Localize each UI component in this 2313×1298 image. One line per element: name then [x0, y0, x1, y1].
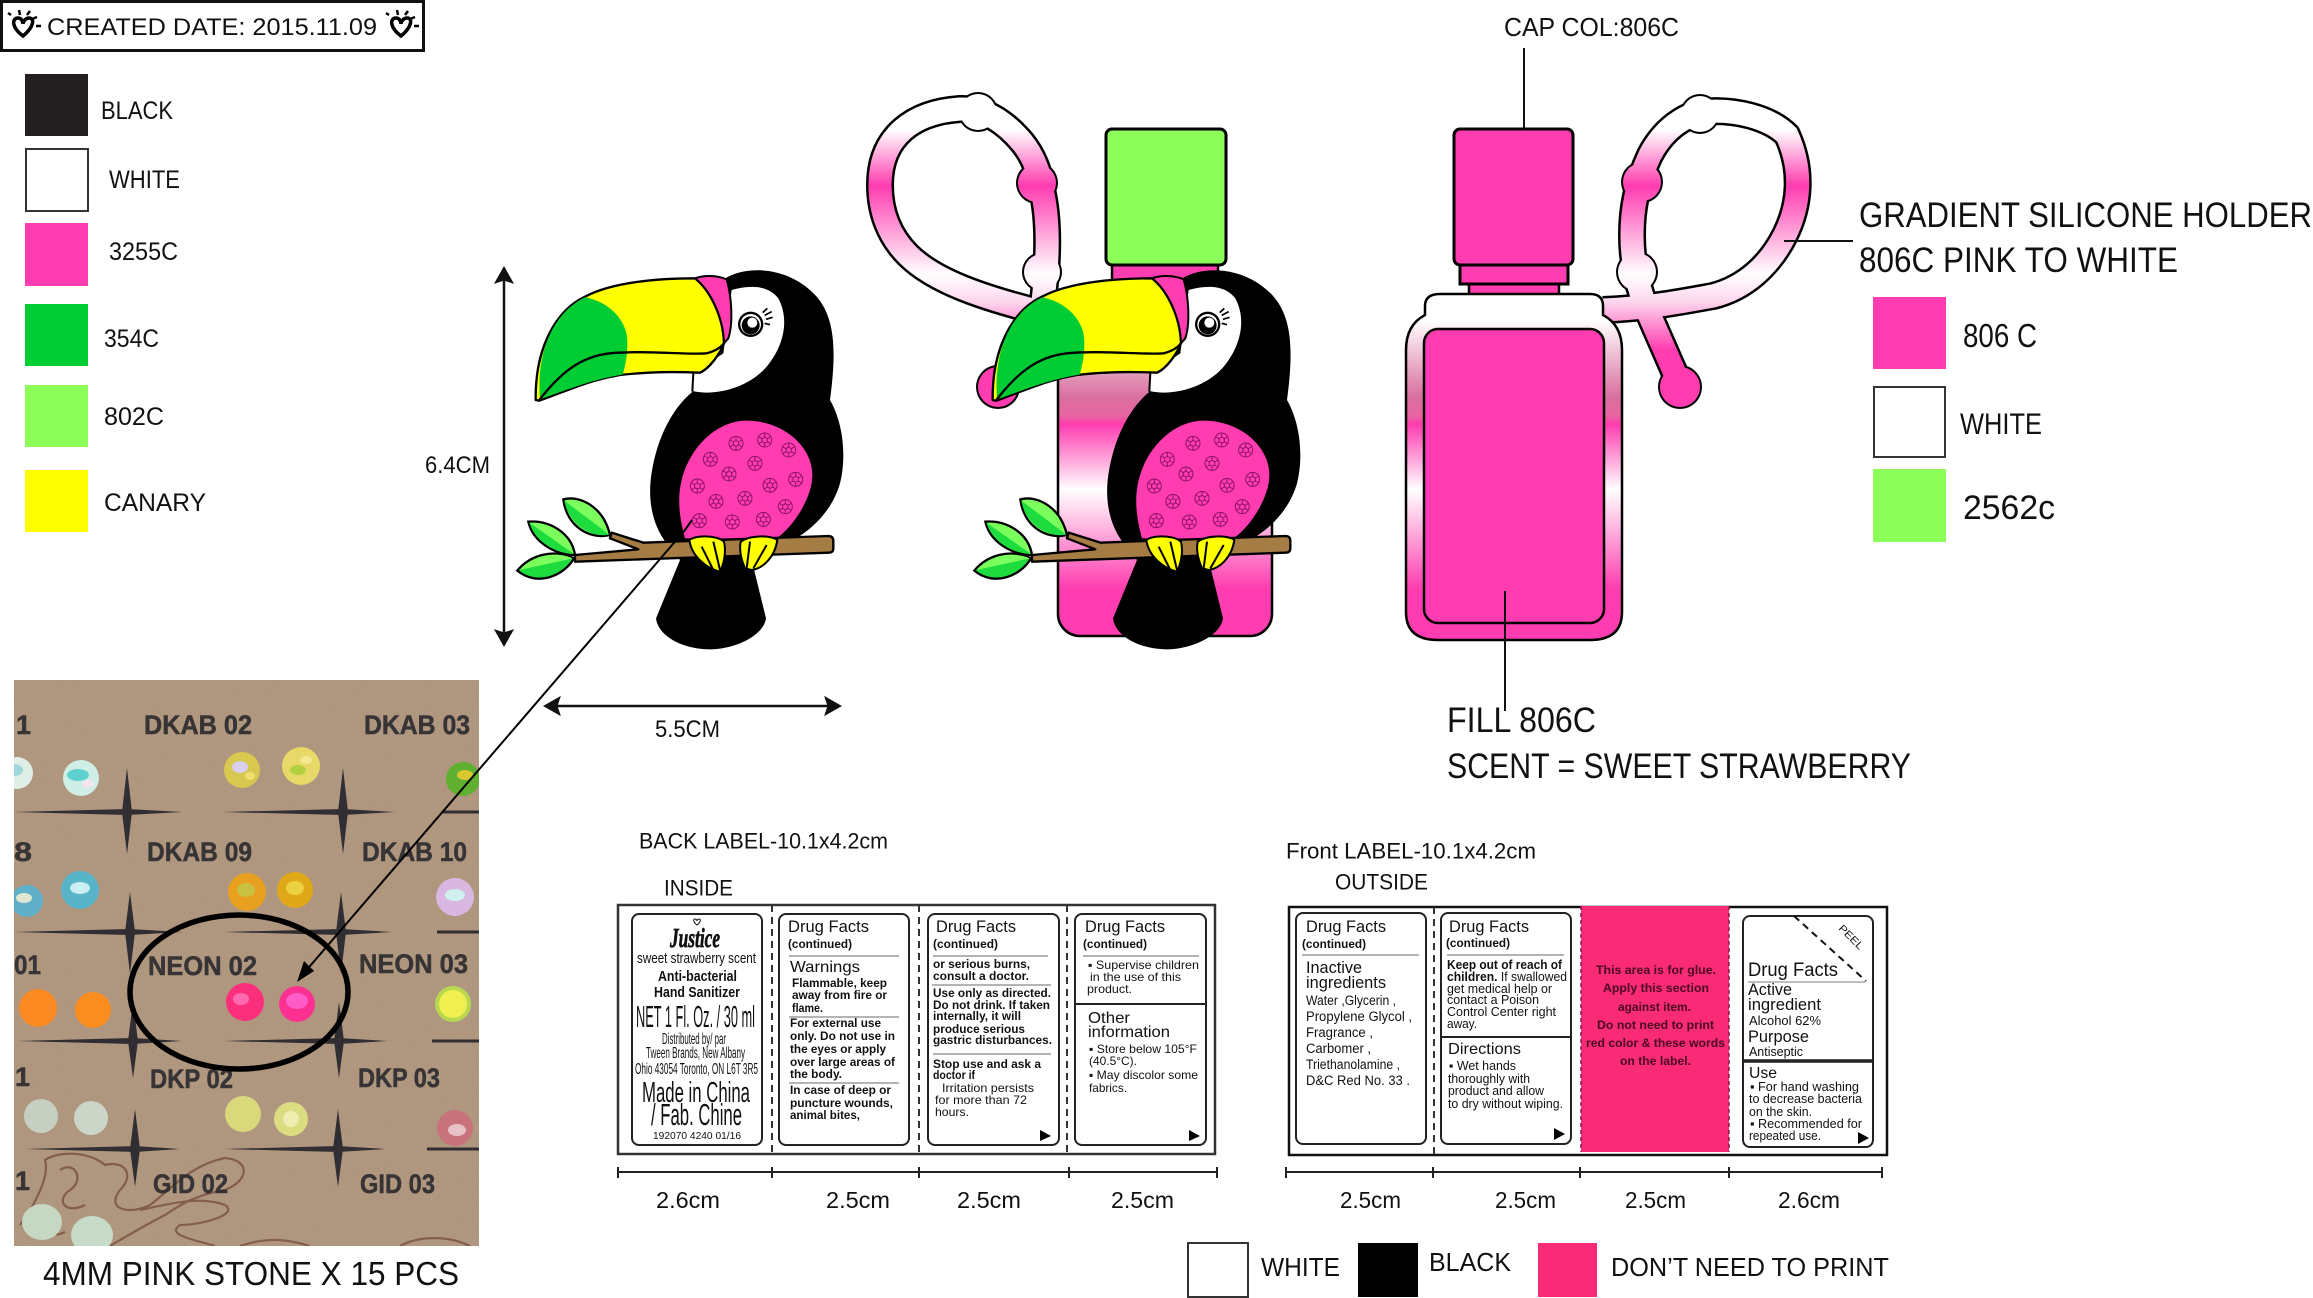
label panel: keep out of reach and directions: product and allow	[1448, 1084, 1545, 1098]
icon: heart right	[386, 10, 419, 36]
label panel: use and stop use: Drug Facts	[936, 917, 1016, 936]
photo: stone sample sheet: DKP 02	[150, 1064, 233, 1094]
label panel: glue area: Apply this section	[1603, 981, 1709, 995]
label panel: inactive ingredients: Triethanolamine ,	[1306, 1057, 1400, 1072]
front label dimension rule: 2.5cm	[1495, 1187, 1556, 1213]
label panel: active ingredient and use: Drug Facts	[1748, 960, 1838, 981]
label panel: active ingredient and use: PEEL	[1836, 923, 1866, 952]
label panel: keep out of reach and directions	[1441, 913, 1571, 1144]
label panel: product front: Distributed by/ par	[662, 1031, 726, 1048]
label panel: other information: Other	[1088, 1010, 1131, 1027]
icon: heart left	[8, 10, 41, 36]
photo: stone sample sheet: 01	[14, 950, 41, 980]
print legend	[1188, 1243, 1889, 1297]
label panel: use and stop use: internally, it will	[933, 1009, 1021, 1023]
label panel: product front: Justice	[669, 923, 720, 953]
label panel: other information: ▪ Supervise children	[1088, 958, 1199, 972]
print legend: WHITE	[1261, 1252, 1340, 1282]
map doodles	[20, 1154, 470, 1246]
label panel: use and stop use: Stop use and ask a	[933, 1057, 1041, 1071]
colour legend left: CANARY	[104, 489, 206, 517]
label panel: active ingredient and use: ▪ For hand washing	[1750, 1079, 1859, 1094]
label panel: product front: / Fab. Chine	[651, 1097, 742, 1132]
label panel: use and stop use: produce serious	[933, 1022, 1025, 1036]
label panel: use and stop use: consult a doctor.	[933, 969, 1029, 983]
label panel: other information: fabrics.	[1089, 1081, 1127, 1095]
label panel: inactive ingredients: Inactive	[1306, 958, 1362, 977]
photo: stone sample sheet: NEON 03	[359, 949, 468, 979]
panel: back label: NET 1 Fl. Oz. / 30 ml	[636, 999, 755, 1034]
photo: stone sample sheet: DKAB 10	[362, 837, 467, 867]
label panel: product front: Tween Brands, New Albany	[646, 1045, 745, 1062]
label panel: keep out of reach and directions: ▪ Wet hands	[1449, 1059, 1516, 1073]
collar	[1460, 265, 1568, 284]
label panel: use and stop use: or serious burns,	[933, 957, 1030, 971]
label panel: keep out of reach and directions: contact a Poison	[1447, 993, 1539, 1007]
colour legend left: BLACK	[101, 97, 173, 125]
height dimension arrow 6.4CM: 6.4CM	[425, 452, 490, 479]
label panel: other information	[1075, 914, 1206, 1145]
pink bottle with gradient holder	[1406, 94, 1798, 640]
label panel: keep out of reach and directions: get medical help or	[1447, 982, 1552, 996]
label panel: use and stop use: for more than 72	[935, 1093, 1027, 1107]
label panel: warnings: puncture wounds,	[790, 1096, 893, 1110]
label panel: warnings: For external use	[790, 1016, 881, 1030]
front label heading: OUTSIDE	[1335, 870, 1428, 894]
panel: front label	[1289, 906, 1887, 1155]
label panel: warnings: Drug Facts	[788, 917, 869, 936]
label panel: active ingredient and use: Purpose	[1748, 1028, 1809, 1046]
label panel: keep out of reach and directions: (continued)	[1446, 936, 1510, 950]
front label dimension rule	[1286, 1167, 1882, 1213]
photo: stone sample sheet: 1	[15, 1062, 30, 1092]
label panel: active ingredient and use	[1743, 916, 1873, 1147]
green cap bottle with holder and toucan	[880, 92, 1300, 649]
label panel: use and stop use: Use only as directed.	[933, 986, 1051, 1000]
label panel: use and stop use: (continued)	[933, 937, 998, 951]
print legend: BLACK	[1429, 1247, 1512, 1277]
back label heading: BACK LABEL-10.1x4.2cm	[639, 828, 888, 854]
label panel: keep out of reach and directions: away.	[1447, 1017, 1477, 1031]
neck	[1469, 284, 1559, 296]
label panel: inactive ingredients: Carbomer ,	[1306, 1041, 1371, 1056]
label panel: product front: sweet strawberry scent	[637, 950, 757, 967]
label panel: other information: in the use of this	[1090, 970, 1181, 984]
label panel: warnings: Flammable, keep	[792, 976, 887, 990]
label panel: warnings: flame.	[792, 1001, 823, 1015]
bottle fill	[1424, 329, 1604, 623]
neck	[1112, 262, 1218, 332]
label panel: active ingredient and use: ingredient	[1748, 996, 1821, 1014]
label panel: other information: information	[1088, 1024, 1170, 1041]
colour legend left: 354C	[104, 325, 159, 353]
label panel: product front: Hand Sanitizer	[654, 985, 740, 1001]
holder colour legend: 806 C	[1963, 317, 2037, 354]
holder colour legend	[1873, 297, 2055, 542]
photo: stone sample sheet: DKAB 03	[364, 710, 470, 740]
back label heading	[639, 828, 888, 900]
label panel: keep out of reach and directions: Drug Facts	[1449, 917, 1529, 936]
photo: stone sample sheet: GID 03	[360, 1169, 435, 1199]
height dimension arrow 6.4CM	[425, 267, 513, 646]
label panel: keep out of reach and directions: Control Center right	[1447, 1005, 1557, 1019]
date text: CREATED DATE: 2015.11.09	[47, 14, 377, 41]
label panel: warnings: (continued)	[788, 937, 852, 951]
label panel: warnings: In case of deep or	[790, 1083, 891, 1097]
holder colour legend: 2562c	[1963, 489, 2055, 527]
label panel: warnings: Warnings	[790, 959, 860, 976]
label panel: active ingredient and use: to decrease bacteria	[1749, 1091, 1863, 1106]
label panel: warnings: animal bites,	[790, 1108, 860, 1122]
colour legend left: WHITE	[109, 166, 180, 194]
label panel: warnings: only. Do not use in	[790, 1029, 895, 1043]
label panel: inactive ingredients	[1296, 913, 1426, 1144]
label panel: active ingredient and use: Active	[1748, 981, 1792, 999]
label panel: glue area	[1581, 906, 1729, 1152]
back label dimension rule	[618, 1167, 1217, 1213]
width dimension arrow 5.5CM: 5.5CM	[655, 716, 720, 743]
bottle body gradient	[1058, 330, 1272, 636]
fill and scent callout	[1447, 591, 1911, 786]
panel: back label	[618, 905, 1215, 1154]
label panel: use and stop use	[928, 914, 1059, 1145]
code labels: DKAB 02	[144, 710, 252, 740]
label panel: keep out of reach and directions: thoroughly with	[1448, 1072, 1530, 1086]
colour legend left: 3255C	[109, 238, 178, 266]
label panel: glue area: on the label.	[1620, 1054, 1691, 1068]
label panel: other information: (continued)	[1083, 937, 1147, 951]
fill and scent callout: SCENT = SWEET STRAWBERRY	[1447, 747, 1911, 786]
label panel: keep out of reach and directions: Directions	[1448, 1041, 1521, 1058]
colour legend left	[25, 74, 206, 532]
photo: stone sample sheet: DKP 03	[358, 1063, 440, 1093]
label panel: active ingredient and use: Alcohol 62%	[1749, 1013, 1821, 1028]
label panel: inactive ingredients: (continued)	[1302, 937, 1366, 951]
label panel: inactive ingredients: Drug Facts	[1306, 917, 1386, 936]
photo: stone sample sheet	[1, 680, 480, 1254]
gradient holder callout	[1784, 196, 2312, 280]
colour legend left: 802C	[104, 403, 164, 431]
fill and scent callout: FILL 806C	[1447, 701, 1596, 740]
label panel: inactive ingredients: D&C Red No. 33 .	[1306, 1073, 1410, 1088]
label panel: glue area: Do not need to print	[1597, 1018, 1714, 1032]
width dimension arrow 5.5CM	[544, 697, 841, 743]
label panel: inactive ingredients: Fragrance ,	[1306, 1025, 1373, 1040]
label panel: active ingredient and use: on the skin.	[1749, 1104, 1812, 1119]
photo: stone sample sheet: 1	[15, 1166, 30, 1196]
label panel: keep out of reach and directions: Keep out of reach of	[1447, 958, 1563, 972]
back label dimension rule: 2.5cm	[826, 1187, 890, 1213]
label panel: use and stop use: doctor if	[933, 1068, 976, 1082]
label panel: warnings: the body.	[790, 1067, 842, 1081]
back label dimension rule: 2.5cm	[957, 1187, 1021, 1213]
back label dimension rule: 2.5cm	[1111, 1187, 1174, 1213]
holder colour legend: WHITE	[1960, 408, 2042, 441]
label panel: product front: Anti-bacterial	[658, 969, 737, 985]
label panel: other information: ▪ Store below 105°F	[1089, 1042, 1197, 1056]
back label dimension rule: 2.6cm	[656, 1187, 720, 1213]
silicone holder back	[880, 92, 1062, 409]
arrow: stone placement to sample	[297, 520, 692, 982]
label panel: warnings: the eyes or apply	[790, 1042, 886, 1056]
label panel: glue area: This area is for glue.	[1596, 963, 1716, 977]
bottle outer	[1406, 294, 1622, 640]
label panel: product front: Made in China	[642, 1077, 751, 1109]
label panel: warnings: over large areas of	[790, 1055, 896, 1069]
label panel: product front	[632, 914, 762, 1145]
label panel: active ingredient and use: repeated use.	[1749, 1128, 1821, 1143]
label panel: keep out of reach and directions: children. If swallowed	[1447, 970, 1567, 984]
label panel: warnings	[779, 914, 909, 1145]
label panel: product front: Ohio 43054 Toronto, ON L6T 3R5	[635, 1061, 758, 1078]
print legend: DON’T NEED TO PRINT	[1611, 1252, 1889, 1282]
label panel: active ingredient and use: ▪ Recommended for	[1750, 1116, 1863, 1131]
gradient holder callout: 806C PINK TO WHITE	[1859, 241, 2178, 280]
front label heading: Front LABEL-10.1x4.2cm	[1286, 838, 1536, 864]
label panel: product front: 192070 4240 01/16	[653, 1130, 741, 1142]
callout ellipse around NEON 02	[130, 915, 348, 1069]
label panel: other information: (40.5°C).	[1089, 1054, 1137, 1068]
label panel: warnings: away from fire or	[792, 988, 887, 1002]
label panel: keep out of reach and directions: to dry without wiping.	[1448, 1097, 1563, 1111]
front label dimension rule: 2.6cm	[1778, 1187, 1840, 1213]
photo: stone sample sheet: 1	[16, 710, 31, 740]
back label heading: INSIDE	[664, 876, 733, 900]
toucan on bottle	[974, 270, 1300, 649]
stone caption: 4MM PINK STONE X 15 PCS	[43, 1255, 459, 1292]
photo: stone sample sheet: NEON 02	[148, 951, 257, 981]
photo: stone sample sheet: DKAB 09	[147, 837, 252, 867]
photo: stone sample sheet: 8	[14, 837, 32, 867]
pink cap	[1454, 129, 1573, 265]
label panel: inactive ingredients: Propylene Glycol ,	[1306, 1009, 1412, 1024]
created date header	[2, 2, 424, 50]
label panel: active ingredient and use: Antiseptic	[1749, 1044, 1803, 1059]
label panel: use and stop use: Do not drink. If taken	[933, 998, 1050, 1012]
label panel: use and stop use: hours.	[935, 1105, 969, 1119]
label panel: glue area: against item.	[1618, 1000, 1691, 1014]
label panel: other information: product.	[1087, 982, 1132, 996]
label panel: other information: ▪ May discolor some	[1089, 1068, 1198, 1082]
label panel: glue area: red color & these words	[1586, 1036, 1725, 1050]
label panel: use and stop use: gastric disturbances.	[933, 1033, 1052, 1047]
green cap	[1106, 129, 1226, 265]
front label heading	[1286, 838, 1536, 894]
label panel: inactive ingredients: ingredients	[1306, 973, 1386, 992]
toucan charm	[517, 270, 843, 649]
stones	[1, 747, 480, 1254]
label panel: other information: Drug Facts	[1085, 917, 1165, 936]
label panel: use and stop use: Irritation persists	[942, 1081, 1034, 1095]
front label dimension rule: 2.5cm	[1625, 1187, 1686, 1213]
front label dimension rule: 2.5cm	[1340, 1187, 1401, 1213]
alignment crosses	[14, 768, 479, 1187]
photo: stone sample sheet: GID 02	[153, 1169, 228, 1199]
label panel: inactive ingredients: Water ,Glycerin ,	[1306, 993, 1396, 1008]
silicone holder front	[1603, 94, 1798, 409]
label panel: active ingredient and use: Use	[1749, 1065, 1777, 1082]
cap colour callout: CAP COL:806C	[1504, 12, 1679, 42]
